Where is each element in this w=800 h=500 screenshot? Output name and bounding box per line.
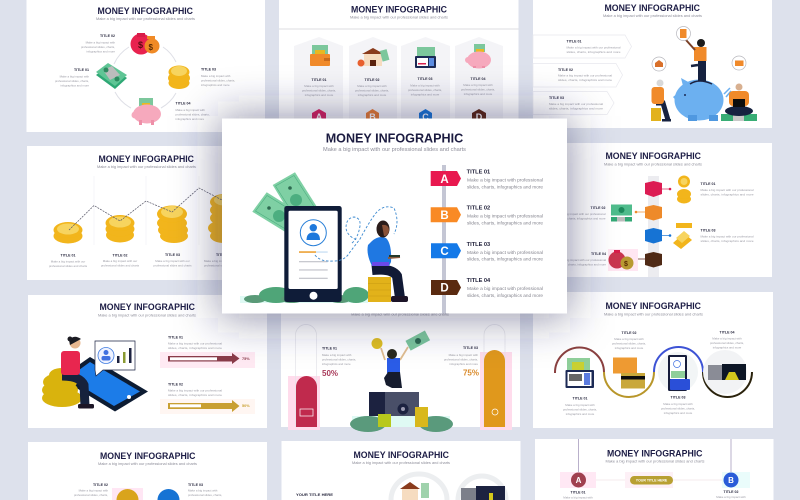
heading: MONEY INFOGRAPHIC — [100, 451, 196, 461]
pill title — [625, 472, 673, 488]
heading: MONEY INFOGRAPHIC — [98, 6, 193, 16]
speech bubble with chart — [95, 341, 135, 376]
heading: MONEY INFOGRAPHIC — [604, 3, 700, 13]
card text 04 — [461, 77, 495, 96]
label: title 02: professional slides, charts, — [81, 45, 115, 49]
label 04: Make a big impact with our professional — [555, 258, 606, 262]
hexagon badges: A — [316, 112, 323, 122]
card text 02 — [355, 78, 389, 97]
item 04 text: Make a big impact with professional — [467, 286, 543, 291]
label 02 — [716, 490, 746, 499]
card text 03: TITLE 03 — [418, 77, 432, 81]
label: title 01: TITLE 01 — [74, 68, 89, 72]
chevron 01: slides, charts, infographics and more — [566, 50, 621, 54]
icon: piggy bank — [465, 44, 491, 68]
item 02 text: slides, charts, infographics and more — [467, 220, 543, 226]
chevron 02: Make a big impact with our professional — [558, 74, 612, 78]
node A: A — [576, 476, 582, 485]
tag C — [431, 243, 461, 258]
figure: man with laptop — [721, 84, 757, 121]
label 01: Make a big impact with our professional — [700, 188, 754, 192]
label 02: professional slides, charts, — [74, 493, 108, 497]
label: title 02: infographics and more — [86, 50, 115, 54]
card text 02: TITLE 02 — [365, 78, 379, 82]
tag D — [431, 280, 461, 295]
label 01: TITLE 01 — [700, 182, 715, 186]
label 02: Make a big impact with — [716, 495, 746, 499]
chevron 03: slides, charts, infographics and more — [549, 106, 603, 110]
label 01: TITLE 01 — [573, 396, 587, 400]
chevron 02 — [533, 64, 622, 87]
subheading: Make a big impact with our professional slides and charts — [352, 461, 450, 465]
slide: lower right, wave timeline — [533, 292, 773, 428]
label 04 — [555, 252, 606, 266]
label 02: Make a big impact with — [79, 488, 108, 492]
icon: banknote bundle — [96, 63, 127, 89]
text: your title here: YOUR TITLE HERE — [296, 493, 334, 497]
label 04: Make a big impact with — [712, 336, 742, 340]
chevron 01: Make a big impact with our professional — [566, 46, 621, 50]
label 03 with 75 percent — [444, 346, 479, 378]
label: title 04: Make a big impact with — [176, 108, 205, 112]
label 03: Make a big impact with — [188, 488, 218, 492]
label 03 — [661, 396, 695, 415]
card text 03: Make a big impact with — [410, 84, 440, 88]
label 03 — [188, 483, 222, 497]
label 03: slides, charts, infographics and more — [700, 239, 754, 243]
label: title 03: TITLE 03 — [201, 68, 216, 72]
item 03 text: slides, charts, infographics and more — [467, 256, 543, 262]
icon: phone and wallet — [658, 352, 698, 392]
item 03 text: TITLE 03 — [467, 242, 490, 248]
node B — [722, 472, 750, 488]
card text 03: professional slides, charts, — [408, 88, 442, 92]
label 03: professional slides and charts — [153, 264, 192, 268]
cycle arrows — [114, 47, 176, 108]
label 01: professional slides, charts, — [563, 408, 597, 412]
label 01: slides, charts, infographics and more — [700, 192, 754, 196]
subheading: Make a big impact with our professional slides and charts — [606, 460, 705, 464]
tablet — [60, 357, 148, 412]
label 03: Make a big impact with our professional — [700, 234, 754, 238]
coin and banknote — [372, 331, 430, 351]
item 02 text: TITLE 02 — [467, 206, 490, 212]
card text 02: Make a big impact with — [357, 84, 387, 88]
cube blue — [645, 228, 662, 244]
label 01 — [49, 254, 88, 268]
label 03: TITLE 03 — [700, 228, 715, 232]
main subheading: Make a big impact with our professional slides and charts — [323, 147, 466, 153]
tag B: B — [440, 210, 449, 222]
icon: wallet — [310, 45, 330, 66]
card text 02: infographics and more — [358, 93, 387, 97]
label 02: Make a big impact with our professional — [555, 212, 606, 216]
label 01 with 50 percent: TITLE 01 — [322, 346, 337, 350]
card text 01: infographics and more — [305, 93, 334, 97]
label 02: TITLE 02 — [113, 254, 127, 258]
subheading: Make a big impact with our professional slides and charts — [604, 312, 703, 316]
label 04: TITLE 04 — [591, 252, 606, 256]
slide: lower left, tablet and progress arrows — [28, 295, 267, 428]
label 04: infographics and more — [713, 346, 742, 350]
icon: money bags: $ — [624, 261, 628, 268]
chevron 03 — [533, 92, 614, 114]
label 01: TITLE 01 — [61, 254, 75, 258]
coins under person — [42, 368, 82, 407]
label 01: Make a big impact with — [563, 496, 593, 500]
item 02 text: Make a big impact with professional — [467, 214, 543, 218]
label 02: professional slides, charts, — [612, 342, 646, 346]
icon: gold bars — [673, 223, 692, 249]
figure: seated older person — [651, 80, 671, 122]
label 04 — [710, 330, 744, 350]
item 02 text — [467, 206, 543, 226]
progress 01: 75% — [242, 357, 250, 361]
label 02 — [74, 483, 108, 497]
label 01: Make a big impact with — [565, 403, 595, 407]
heading: MONEY INFOGRAPHIC — [606, 151, 701, 161]
card text 03: infographics and more — [411, 92, 440, 96]
node A — [560, 472, 596, 488]
label 04: Make a big impact with — [204, 259, 234, 263]
connector lines — [578, 439, 731, 480]
main heading: MONEY INFOGRAPHIC — [326, 131, 464, 146]
item 04 text: TITLE 04 — [467, 278, 490, 284]
icon bubble: top — [676, 26, 690, 40]
icon: money bags: $ — [138, 40, 143, 50]
progress 01: Make a big impact with our professional — [168, 342, 222, 346]
slide: top right, piggy bank with people — [533, 0, 772, 128]
heading: MONEY INFOGRAPHIC — [354, 450, 449, 460]
progress 01: slides, charts, infographics and more — [168, 346, 222, 350]
coin stack 3 — [157, 206, 188, 243]
coin stack 2 — [106, 215, 134, 242]
icon bubble: house — [652, 57, 666, 71]
label 01 with 50 percent: infographics and more — [322, 362, 351, 366]
centre slide shadow — [218, 116, 570, 318]
progress 02: Make a big impact with our professional — [168, 388, 222, 392]
wave line — [555, 347, 752, 397]
chevron 03: Make a big impact with our professional — [549, 102, 603, 106]
heading: MONEY INFOGRAPHIC — [606, 301, 701, 311]
label: title 03: infographics and more — [201, 83, 230, 87]
card backgrounds — [294, 37, 503, 120]
icon: coins — [677, 176, 691, 204]
item 03 text — [467, 242, 543, 262]
label: title 02: Make a big impact with — [86, 40, 115, 44]
card text 04: Make a big impact with — [463, 83, 493, 87]
label 03 with 75 percent: infographics and more — [449, 362, 478, 366]
icon: card terminal — [566, 358, 594, 388]
icon: gold coin — [112, 488, 143, 500]
progress 02: slides, charts, infographics and more — [168, 393, 222, 397]
slide: lower centre, safe and arches — [281, 300, 520, 432]
hexagon badges: D — [476, 112, 483, 122]
subheading: Make a big impact with our professional slides and charts — [604, 162, 702, 166]
jumping woman — [381, 347, 408, 388]
label 03: Make a big impact with — [663, 402, 693, 406]
label: title 03: Make a big impact with — [201, 74, 231, 78]
tag D: D — [440, 283, 449, 295]
label 02: TITLE 02 — [622, 331, 636, 335]
chevron 01 — [533, 35, 632, 58]
subheading: Make a big impact with our professional slides and charts — [98, 462, 197, 466]
label 01: TITLE 01 — [571, 490, 585, 494]
connectors — [635, 188, 671, 260]
icon: bank house — [358, 48, 389, 66]
icon: money bags: $ — [148, 43, 154, 52]
progress 02 — [160, 382, 255, 414]
icon: money bags — [608, 249, 638, 271]
progress 02: TITLE 02 — [168, 382, 183, 386]
label 04: TITLE 04 — [216, 253, 231, 257]
label 03: professional slides, charts, — [188, 493, 222, 497]
label 01 with 50 percent: professional slides, charts, — [322, 358, 356, 362]
growth dashed line — [69, 188, 222, 230]
item 01 text — [467, 170, 543, 190]
subheading: Make a big impact with our professional slides and charts — [603, 14, 702, 18]
tag A — [431, 171, 461, 186]
progress 02: 50% — [242, 404, 250, 408]
label 03: TITLE 03 — [671, 396, 685, 400]
tag C: C — [440, 246, 449, 258]
label 03 — [153, 253, 192, 268]
subheading: Make a big impact with our professional slides and charts — [97, 165, 196, 169]
label: title 01: Make a big impact with — [60, 74, 89, 78]
hexagon badges: C — [422, 112, 429, 122]
label 01 with 50 percent: Make a big impact with — [322, 353, 352, 357]
subheading: Make a big impact with our professional slides and charts — [98, 314, 196, 318]
label 02 — [101, 254, 140, 268]
tag B — [431, 207, 461, 222]
label 01 with 50 percent: 50% — [322, 369, 338, 378]
label 03 — [700, 228, 754, 243]
label 02: TITLE 02 — [724, 490, 738, 494]
label 03: infographics and more — [664, 411, 693, 415]
icon: house in ring — [391, 474, 447, 500]
chevron 02: TITLE 02 — [558, 68, 573, 72]
avatar in circle — [300, 220, 326, 246]
item 01 text: slides, charts, infographics and more — [467, 184, 543, 190]
icon: pink piggy bank — [132, 98, 161, 125]
label: title 04 — [176, 102, 210, 121]
cube red — [645, 181, 662, 197]
icon: banknote — [611, 204, 632, 222]
card text 01: Make a big impact with — [304, 84, 334, 88]
icon: money bags — [130, 33, 160, 54]
label 02: slides, charts, infographics and more — [558, 216, 606, 220]
label: title 03: professional slides, charts, — [201, 78, 235, 82]
label: title 04: TITLE 04 — [176, 102, 190, 106]
card text 01 — [302, 78, 336, 97]
item 01 text: Make a big impact with professional — [467, 178, 543, 182]
card text 02: professional slides, charts, — [355, 88, 389, 92]
label 01: Make a big impact with our — [51, 260, 85, 264]
label 01: professional slides and charts — [49, 264, 88, 268]
item 04 text — [467, 278, 543, 298]
text lines — [299, 261, 328, 279]
label 02 — [612, 331, 646, 350]
label 03: professional slides, charts, — [661, 406, 695, 410]
label 03 with 75 percent: 75% — [463, 368, 479, 378]
node B: B — [728, 476, 734, 485]
card text 01: TITLE 01 — [312, 78, 326, 82]
subheading: Make a big impact with our professional slides and charts — [351, 312, 449, 316]
figure: person standing on pig — [686, 39, 706, 81]
progress 01: TITLE 01 — [168, 336, 183, 340]
label: title 02: TITLE 02 — [100, 34, 115, 38]
label 02: professional slides and charts — [101, 264, 140, 268]
label 01 — [700, 182, 754, 196]
icon bubble: card — [732, 56, 746, 70]
label 02: TITLE 02 — [93, 483, 108, 487]
white column — [648, 176, 659, 277]
progress bar — [299, 251, 328, 253]
slide: top centre, four hexagon cards — [279, 0, 518, 122]
chevron 02: slides, charts, infographics and more — [558, 78, 612, 82]
slide: middle right, stacked cubes timeline — [555, 143, 772, 277]
heading: MONEY INFOGRAPHIC — [100, 302, 195, 312]
label 04: professional slides — [204, 264, 228, 268]
coin stack 4 — [208, 194, 238, 243]
subheading: Make a big impact with our professional slides and charts — [96, 17, 195, 21]
right arch — [480, 324, 512, 430]
label: title 02 — [81, 34, 115, 54]
illustration: bushes — [240, 287, 369, 303]
heading: MONEY INFOGRAPHIC — [607, 449, 703, 459]
illustration: seated woman with tablet — [368, 220, 408, 302]
slide: bottom left, cropped — [28, 442, 267, 500]
label 03 with 75 percent: Make a big impact with — [449, 353, 478, 357]
tag A: A — [440, 174, 449, 186]
item 03 text: Make a big impact with professional — [467, 250, 543, 255]
label 02: Make a big impact with — [614, 337, 644, 341]
card text 04: TITLE 04 — [471, 77, 485, 81]
label 03: Make a big impact with our — [155, 259, 190, 263]
label 02: TITLE 02 — [591, 206, 606, 210]
hexagon badges: B — [369, 112, 376, 122]
label 03: TITLE 03 — [165, 253, 180, 257]
chevron 03: TITLE 03 — [549, 96, 564, 100]
card text 04: infographics and more — [464, 92, 493, 96]
label 03 with 75 percent: professional slides, charts, — [444, 358, 478, 362]
bushes and coin stacks — [350, 407, 453, 432]
label 04: TITLE 04 — [720, 330, 734, 334]
heading: MONEY INFOGRAPHIC — [351, 4, 447, 14]
label: title 01 — [55, 68, 89, 88]
label 01 — [563, 490, 593, 500]
heading: MONEY INFOGRAPHIC — [98, 154, 194, 164]
label: title 01: professional slides, charts, — [55, 79, 89, 83]
seated woman — [61, 336, 94, 408]
label 01 — [563, 396, 597, 416]
icon: blue piggy bank — [673, 78, 731, 121]
card text 04: professional slides, charts, — [461, 88, 495, 92]
panel: centre feature slide — [222, 118, 567, 314]
label 01 with 50 percent — [322, 346, 356, 378]
label 02 — [555, 206, 606, 220]
icon: coin stack — [168, 66, 190, 89]
coin stack 1 — [54, 222, 82, 244]
label 03 with 75 percent: TITLE 03 — [463, 346, 478, 350]
label: title 04: professional slides, charts, — [176, 112, 210, 116]
pill title: YOUR TITLE HERE — [636, 479, 668, 483]
label 04: professional slides, charts, — [710, 341, 744, 345]
illustration: banknotes — [252, 172, 320, 234]
illustration: phone — [284, 206, 342, 302]
icon: bank cards — [613, 358, 645, 388]
progress 01 — [160, 336, 255, 368]
label 02: Make a big impact with our — [103, 259, 137, 263]
cube brown — [645, 252, 662, 268]
slide: bottom right, cropped — [535, 439, 774, 500]
icon: open safe — [703, 350, 747, 394]
icon: blue circle — [158, 489, 180, 500]
card text 03 — [408, 77, 442, 96]
item 04 text: slides, charts, infographics and more — [467, 293, 543, 298]
label: title 03 — [201, 68, 235, 87]
label: title 04: infographics and more — [176, 117, 204, 121]
label: title 01: infographics and more — [60, 84, 89, 88]
slide: middle left, growing coin stacks — [27, 146, 238, 280]
label 01: infographics and more — [566, 412, 595, 416]
subheading: Make a big impact with our professional slides and charts — [350, 16, 448, 20]
safe — [369, 392, 419, 426]
cube orange — [645, 205, 662, 220]
illustration: coin stack seat — [368, 277, 391, 302]
left arch — [288, 324, 320, 430]
slide: top left, circular money cycle — [26, 0, 265, 132]
icon: safe in ring — [458, 476, 506, 500]
label 03: TITLE 03 — [188, 483, 203, 487]
item 01 text: TITLE 01 — [467, 170, 490, 176]
label 04: slides, charts, infographics and more — [559, 262, 606, 266]
chevron 01: TITLE 01 — [566, 40, 581, 44]
vertical timeline bar — [442, 165, 446, 314]
hexagon badges — [312, 109, 486, 122]
slide: bottom centre, cropped — [282, 441, 520, 500]
icon: card machine — [415, 47, 436, 68]
label 02: infographics and more — [615, 346, 644, 350]
label 04 — [204, 253, 234, 268]
dashed flight path — [315, 207, 397, 261]
card text 01: professional slides, charts, — [302, 88, 336, 92]
